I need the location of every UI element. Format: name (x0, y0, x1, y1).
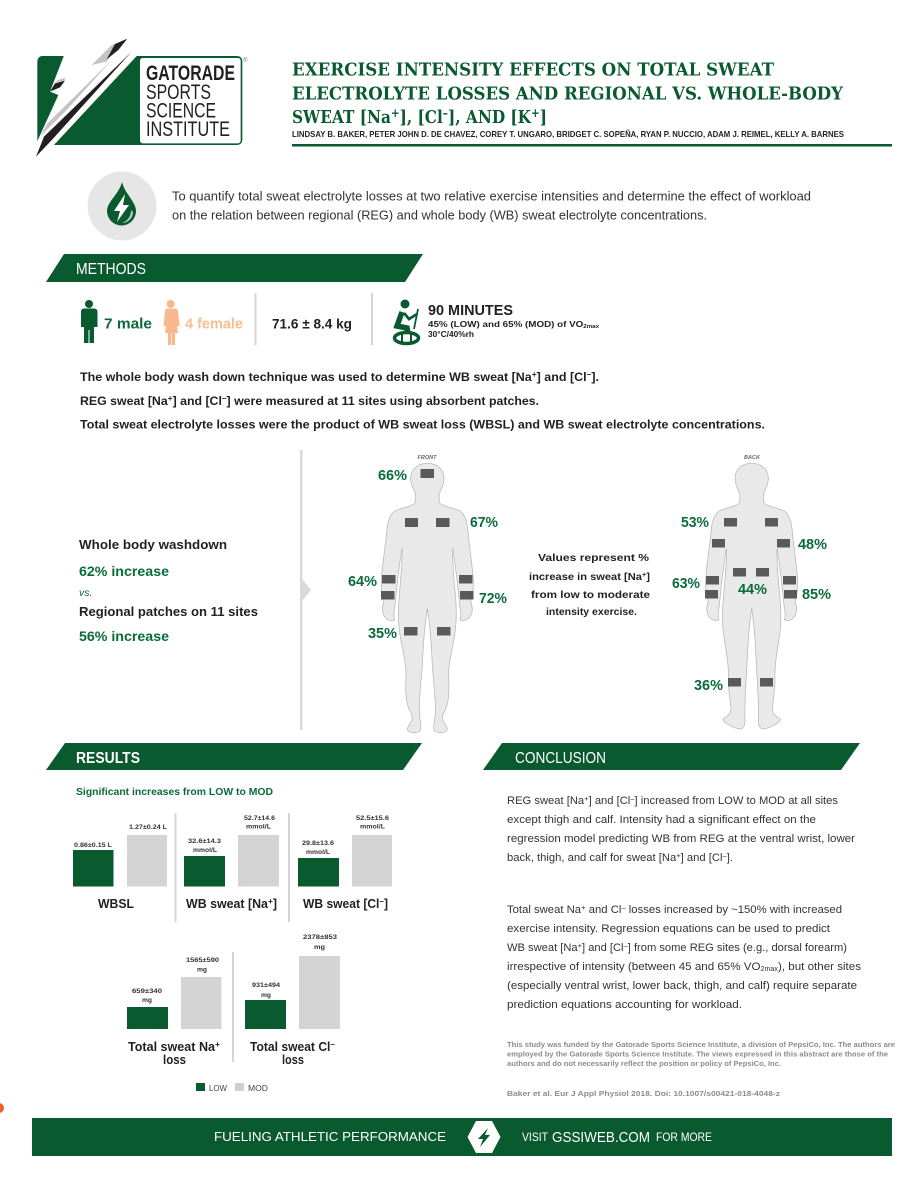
bar chart: WB sweat sodium: ] (273, 897, 277, 911)
bar chart: total sweat chloride loss: mg (261, 992, 271, 999)
diagram note (529, 552, 650, 618)
bar chart: WB sweat sodium: WB sweat [Na (186, 897, 269, 911)
conclusion text: first paragraph: REG sweat [Na (507, 795, 585, 807)
bar chart: total sweat chloride loss: – (330, 1039, 335, 1049)
conclusion text: second paragraph: – (624, 941, 628, 950)
logo: Gatorade Sports Science Institute: GATORADE (146, 62, 235, 85)
body diagram: back: 53% (681, 515, 709, 531)
bar chart: total sweat chloride loss: 931±494 (252, 982, 280, 989)
bar chart: total sweat chloride loss (245, 934, 340, 1067)
bar chart: WBSL: 0.86±0.15 L (74, 842, 112, 849)
body diagram: front: 72% (479, 591, 507, 607)
funding disclosure: employed by the Gatorade Sports Science Institute. The views expressed in this abstract are those of the (507, 1050, 888, 1058)
footer banner: GSSIWEB.COM (552, 1130, 650, 1146)
conclusion text: second paragraph: – (621, 903, 626, 912)
conclusion text: first paragraph: except thigh and calf. Intensity had a significant effect on the (507, 814, 816, 826)
conclusion text: first paragraph: ] and [Cl (681, 852, 722, 864)
conclusion text: second paragraph: exercise intensity. Regression equations can be used to predict (507, 923, 831, 935)
conclusion text: second paragraph: and Cl (586, 904, 621, 916)
logo: Gatorade Sports Science Institute: ® (243, 57, 248, 64)
duration and conditions: 2max (583, 324, 599, 330)
title: EXERCISE INTENSITY EFFECTS ON TOTAL SWEAT (292, 60, 775, 80)
participants: 4 female: 4 female (185, 316, 243, 332)
diagram note: + (642, 571, 646, 579)
diagram note: increase in sweat [Na (529, 571, 636, 583)
logo: Gatorade Sports Science Institute: INSTITUTE (146, 118, 230, 141)
footer banner (32, 1118, 892, 1156)
conclusion text: second paragraph (507, 903, 861, 1011)
conclusion text: second paragraph: Total sweat Na (507, 904, 581, 916)
comparison text (79, 537, 258, 644)
comparison text: vs. (79, 587, 92, 599)
title (292, 60, 844, 128)
bar chart: WB sweat sodium: 32.6±14.3 (188, 838, 221, 845)
heading: methods: METHODS (76, 261, 146, 278)
bar chart: total sweat sodium loss: Total sweat Na (128, 1040, 215, 1054)
logo: Gatorade Sports Science Institute: SCIENCE (146, 100, 216, 122)
heading: results: RESULTS (76, 750, 140, 767)
bar chart: WB sweat sodium: mmol/L (246, 824, 271, 830)
objective text (172, 188, 811, 222)
bar chart: total sweat sodium loss: mg (197, 966, 207, 974)
diagram note: from low to moderate (531, 589, 650, 601)
methods description: ]. (591, 370, 599, 384)
bar chart: total sweat chloride loss: Total sweat Cl (250, 1040, 333, 1054)
citation: Baker et al. Eur J Appl Physiol 2018. Doi: 10.1007/s00421-018-4048-z (507, 1089, 780, 1098)
body diagram: front (348, 455, 507, 733)
bar chart: total sweat chloride loss: loss (282, 1053, 304, 1067)
title: ], [Cl (400, 107, 443, 128)
footer banner: FOR MORE (656, 1132, 712, 1144)
bar chart: WB sweat chloride: 52.5±15.6 (356, 815, 389, 822)
bar chart: total sweat sodium loss: 1565±590 (186, 957, 219, 964)
conclusion text: second paragraph: (especially ventral wrist, lower back, thigh, and calf) require separate (507, 980, 857, 992)
icon: sweat drop with lightning bolt (88, 172, 156, 240)
methods description: ] were measured at 11 sites using absorbent patches. (227, 394, 539, 408)
conclusion text: second paragraph: ] from some REG sites (e.g., dorsal forearm) (628, 942, 847, 954)
participants: 7 male: 7 male (104, 316, 152, 332)
bar chart: WBSL (73, 824, 167, 911)
conclusion text: second paragraph: irrespective of intensity (between 45 and 65% VO (507, 961, 754, 973)
body diagram: back: 36% (694, 678, 723, 694)
comparison text: Whole body washdown (79, 537, 227, 552)
methods description: The whole body wash down technique was used to determine WB sweat [Na (80, 370, 514, 384)
conclusion text: first paragraph: ]. (727, 852, 733, 864)
body diagram: back: 48% (798, 537, 827, 553)
logo: Gatorade Sports Science Institute (36, 39, 248, 157)
methods description: REG sweat [Na (80, 394, 165, 408)
bar chart: WB sweat sodium: + (268, 896, 273, 906)
funding disclosure (507, 1040, 895, 1068)
bar chart: total sweat chloride loss: 2378±853 (303, 934, 337, 941)
comparison text: 62% increase (79, 564, 170, 579)
footer banner: FUELING ATHLETIC PERFORMANCE (214, 1129, 446, 1144)
legend: MOD (248, 1083, 268, 1093)
diagram note: intensity exercise. (546, 606, 637, 618)
bar chart: WB sweat chloride (298, 815, 392, 911)
bar chart: WB sweat chloride: mmol/L (360, 824, 385, 830)
icon: person on exercise bike (394, 300, 418, 344)
title: ] (540, 107, 547, 128)
conclusion text: first paragraph: + (584, 794, 589, 803)
conclusion text: first paragraph: – (630, 794, 635, 803)
logo: Gatorade Sports Science Institute: SPORTS (146, 81, 211, 104)
funding disclosure: This study was funded by the Gatorade Sports Science Institute, a division of PepsiCo, Inc. The authors are (507, 1040, 895, 1049)
bar chart: total sweat chloride loss: mg (314, 944, 325, 951)
body diagram: back (672, 455, 831, 729)
bar chart: WB sweat chloride: mmol/L (306, 849, 330, 856)
title: + (391, 106, 400, 120)
heading: conclusion (483, 743, 860, 770)
conclusion text: first paragraph (507, 794, 855, 864)
title: ], AND [K (448, 107, 532, 128)
conclusion text: first paragraph: ] and [Cl (589, 795, 630, 807)
funding disclosure: authors and do not necessarily reflect the position or policy of PepsiCo, Inc. (507, 1059, 781, 1068)
participants: 4 female (164, 300, 243, 345)
body diagram: front: 35% (368, 626, 397, 642)
body mass: 71.6 ± 8.4 kg (272, 316, 352, 332)
duration and conditions: 90 MINUTES (428, 303, 513, 319)
bar chart: WBSL: WBSL (98, 897, 134, 911)
bar chart: total sweat sodium loss: mg (142, 997, 152, 1004)
authors: LINDSAY B. BAKER, PETER JOHN D. DE CHAVEZ, COREY T. UNGARO, BRIDGET C. SOPEÑA, RYAN P. NUCCIO, ADAM J. REIMEL, KELLY A. BARNES (292, 129, 844, 139)
conclusion text: first paragraph: + (676, 851, 681, 860)
body diagram: back: 85% (802, 587, 831, 603)
body diagram: front: 64% (348, 574, 377, 590)
conclusion text: first paragraph: ] increased from LOW to MOD at all sites (635, 795, 838, 807)
footer banner: VISIT (522, 1132, 548, 1144)
conclusion text: second paragraph: ] and [Cl (582, 942, 624, 954)
bar chart: WB sweat chloride: WB sweat [Cl (303, 897, 382, 911)
methods description: + (168, 394, 173, 403)
conclusion text: first paragraph: – (722, 851, 727, 860)
duration and conditions (428, 303, 599, 339)
title: SWEAT [Na (292, 107, 408, 128)
body diagram: front: 66% (378, 468, 407, 484)
methods description: – (222, 394, 227, 403)
bar chart: WB sweat chloride: 29.8±13.6 (302, 840, 334, 847)
edge mark (0, 1103, 4, 1113)
participants: 7 male (81, 300, 152, 343)
methods description: – (587, 370, 592, 379)
objective text: To quantify total sweat electrolyte losses at two relative exercise intensities and determine the effect of workload (172, 188, 811, 204)
bar chart: total sweat sodium loss (127, 957, 222, 1067)
conclusion text: first paragraph: back, thigh, and calf for sweat [Na (507, 852, 677, 864)
heading: conclusion: CONCLUSION (515, 750, 606, 767)
comparison text: 56% increase (79, 629, 170, 644)
conclusion text: second paragraph: + (578, 941, 583, 950)
bar chart: WB sweat sodium: 52.7±14.6 (244, 815, 275, 822)
conclusion text: second paragraph: 2max (760, 966, 779, 973)
objective text: on the relation between regional (REG) and whole body (WB) sweat electrolyte concentrations. (172, 208, 707, 222)
comparison text: Regional patches on 11 sites (79, 604, 258, 619)
body diagram: back: 44% (738, 582, 767, 598)
title: ELECTROLYTE LOSSES AND REGIONAL VS. WHOLE-BODY (292, 83, 844, 104)
body diagram: front: 67% (470, 515, 498, 531)
methods description: Total sweat electrolyte losses were the product of WB sweat loss (WBSL) and WB sweat electrolyte concentrations. (80, 418, 765, 432)
heading: results (46, 743, 422, 770)
conclusion text: second paragraph: ), but other sites (778, 961, 861, 973)
bar chart: total sweat sodium loss: 659±340 (132, 988, 162, 995)
conclusion text: second paragraph: losses increased by ~150% with increased (626, 904, 842, 916)
body diagram: front: FRONT (418, 455, 437, 461)
bar chart: WB sweat chloride: ] (384, 897, 388, 911)
body diagram: back: BACK (744, 455, 761, 461)
diagram note: Values represent % (538, 552, 650, 564)
bar chart: WBSL: 1.27±0.24 L (129, 824, 167, 831)
legend (196, 1083, 268, 1093)
diagram note: ] (646, 571, 650, 583)
methods description (80, 370, 765, 432)
bar chart: WB sweat sodium (184, 815, 279, 911)
conclusion text: second paragraph: prediction equations accounting for workload. (507, 999, 742, 1011)
bar chart: total sweat sodium loss: loss (163, 1053, 186, 1067)
duration and conditions: 45% (LOW) and 65% (MOD) of VO (428, 320, 555, 329)
methods description: ] and [Cl (173, 394, 222, 408)
bar chart: total sweat sodium loss: + (215, 1039, 220, 1049)
conclusion text: second paragraph: + (581, 903, 586, 912)
heading: methods (46, 254, 423, 282)
results subheading: Significant increases from LOW to MOD (76, 786, 273, 798)
duration and conditions: 30°C/40%rh (428, 330, 474, 339)
bar chart: WB sweat chloride: – (379, 896, 384, 906)
conclusion text: first paragraph: regression model predicting WB from REG at the ventral wrist, lower (507, 833, 855, 845)
legend: LOW (209, 1083, 227, 1093)
title: + (531, 106, 540, 120)
methods description: + (532, 370, 537, 379)
bar chart: WB sweat sodium: mmol/L (193, 847, 217, 854)
methods description: ] and [Cl (537, 370, 587, 384)
conclusion text: second paragraph: WB sweat [Na (507, 942, 579, 954)
title: – (443, 106, 448, 120)
divider arrow (300, 450, 311, 730)
body diagram: back: 63% (672, 576, 700, 592)
